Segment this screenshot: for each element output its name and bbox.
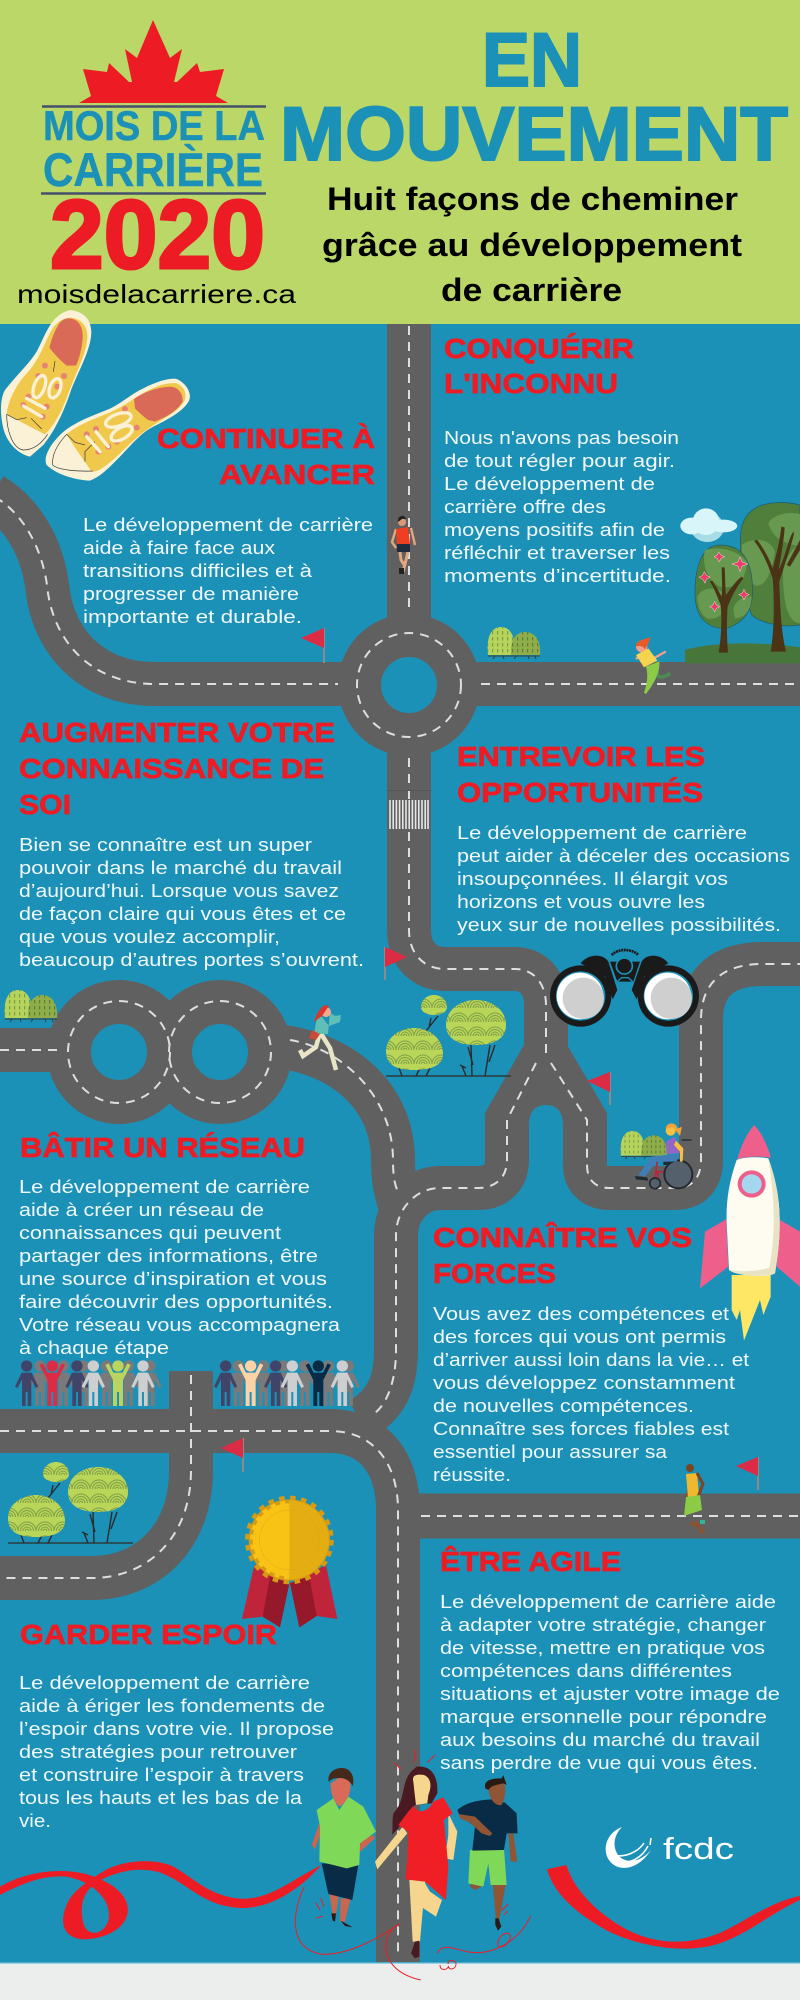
icon: bush by wheelchair bbox=[621, 1131, 667, 1159]
body text: Le développement de bbox=[444, 474, 655, 494]
panel: connaître vos forces bbox=[433, 1222, 749, 1485]
road fork bbox=[485, 1043, 607, 1135]
body text: situations et ajuster votre image de bbox=[440, 1684, 780, 1704]
body text: une source d’inspiration et vous bbox=[19, 1269, 327, 1289]
ribbon decoration bbox=[0, 1861, 800, 1949]
woman running on road bbox=[636, 637, 671, 694]
heading: ÊTRE AGILE bbox=[440, 1546, 621, 1577]
body text: transitions difficiles et à bbox=[83, 561, 313, 581]
icon: yellow shoes bbox=[1, 310, 190, 481]
body text: de tout régler pour agir. bbox=[444, 451, 675, 471]
body text: Le développement de carrière bbox=[83, 515, 373, 535]
body text: Le développement de carrière bbox=[457, 823, 747, 843]
body text: Votre réseau vous accompagnera bbox=[19, 1315, 341, 1335]
body text: faire découvrir des opportunités. bbox=[19, 1292, 333, 1312]
body text: compétences dans différentes bbox=[440, 1661, 732, 1681]
body text: insoupçonnées. Il élargit vos bbox=[457, 869, 728, 889]
body text: beaucoup d’autres portes s’ouvrent. bbox=[19, 950, 364, 970]
subtitle: Huit façons de cheminer bbox=[327, 181, 738, 217]
icon: runner in red shirt bbox=[392, 516, 415, 574]
body text bbox=[83, 515, 373, 627]
heading bbox=[157, 423, 375, 490]
icon: crowd of people bbox=[15, 1360, 360, 1406]
body text: réfléchir et traverser les bbox=[444, 543, 670, 563]
panel: entrevoir les opportunités bbox=[457, 741, 790, 935]
title: MOUVEMENT bbox=[280, 92, 788, 177]
icon: maple leaf bbox=[79, 20, 228, 103]
ribbon left bbox=[242, 1565, 289, 1627]
header logo: 2020 bbox=[50, 180, 265, 289]
heading bbox=[444, 333, 634, 399]
icon: gold medal bbox=[242, 1498, 337, 1627]
heading: CONTINUER À bbox=[157, 423, 375, 454]
subtitle: de carrière bbox=[441, 272, 622, 308]
body text: d’aujourd’hui. Lorsque vous savez bbox=[19, 881, 339, 901]
body bbox=[727, 1157, 780, 1276]
body text: moments d’incertitude. bbox=[444, 566, 671, 586]
panel: conquérir l'inconnu bbox=[444, 333, 679, 586]
left crowd bbox=[15, 1360, 155, 1406]
flag bbox=[384, 947, 407, 980]
body text: moyens positifs afin de bbox=[444, 520, 665, 540]
crosswalk bbox=[387, 790, 431, 829]
icon: rocket bbox=[700, 1125, 800, 1341]
flag bbox=[221, 1438, 244, 1472]
body text: réussite. bbox=[433, 1465, 511, 1485]
icon: three people running bbox=[295, 1750, 531, 1980]
body text: des stratégies pour retrouver bbox=[19, 1742, 297, 1762]
heading: AVANCER bbox=[219, 459, 375, 490]
heading: L'INCONNU bbox=[444, 368, 618, 399]
icon: cloud and blossoming trees bbox=[636, 502, 800, 694]
body text: Bien se connaître est un super bbox=[19, 835, 312, 855]
header logo: CARRIÈRE bbox=[43, 143, 263, 196]
body text: Le développement de carrière aide bbox=[440, 1592, 776, 1612]
panel: continuer à avancer bbox=[83, 423, 375, 627]
heading: CONQUÉRIR bbox=[444, 333, 634, 364]
heading: CONNAISSANCE DE bbox=[19, 753, 324, 784]
body text: progresser de manière bbox=[83, 584, 299, 604]
right crowd shadows bbox=[227, 1360, 360, 1406]
panel: augmenter votre connaissance de soi bbox=[19, 717, 364, 970]
body text bbox=[19, 1177, 341, 1358]
ribbon left bbox=[0, 1861, 321, 1939]
logo text: MOIS DE LA bbox=[43, 102, 265, 149]
body text: Le développement de carrière bbox=[19, 1177, 310, 1197]
body text: à adapter votre stratégie, changer bbox=[440, 1615, 766, 1635]
icon: person in wheelchair bbox=[635, 1123, 692, 1189]
subtitle: grâce au développement bbox=[322, 227, 742, 263]
body text: tous les hauts et les bas de la bbox=[19, 1788, 303, 1808]
icon: binoculars bbox=[550, 950, 699, 1027]
icon: bush on the left bbox=[5, 990, 57, 1022]
red swirl lines bbox=[295, 1750, 531, 1980]
cloud bbox=[680, 508, 737, 542]
body text: yeux sur de nouvelles possibilités. bbox=[457, 915, 781, 935]
ribbon right bbox=[290, 1565, 337, 1627]
icon: woman running with bag bbox=[300, 1005, 341, 1070]
icon: group of trees bbox=[386, 995, 511, 1076]
flag bbox=[587, 1072, 611, 1105]
body text: aide à créer un réseau de bbox=[19, 1200, 264, 1220]
heading bbox=[457, 741, 705, 808]
man in navy shirt bbox=[457, 1775, 518, 1931]
nose bbox=[737, 1125, 771, 1159]
body text: Nous n'avons pas besoin bbox=[444, 428, 679, 448]
body text: partager des informations, être bbox=[19, 1246, 318, 1266]
header logo: moisdelacarriere.ca bbox=[17, 279, 297, 309]
logo rules bbox=[41, 106, 266, 194]
body text: marque ersonnelle pour répondre bbox=[440, 1707, 767, 1727]
flag bbox=[301, 628, 325, 663]
medal disc bbox=[248, 1498, 331, 1582]
body text bbox=[457, 823, 790, 935]
heading bbox=[19, 717, 335, 820]
wordmark: fcdc bbox=[663, 1831, 734, 1866]
body text: d’arriver aussi loin dans la vie… et bbox=[433, 1350, 749, 1370]
title bbox=[280, 18, 788, 177]
heading: SOI bbox=[19, 789, 71, 820]
heading bbox=[433, 1222, 692, 1289]
body text bbox=[19, 835, 364, 970]
right crowd bbox=[214, 1360, 354, 1406]
body text: Connaître ses forces fiables est bbox=[433, 1419, 729, 1439]
body text: aide à ériger les fondements de bbox=[19, 1696, 325, 1716]
panel: bâtir un réseau bbox=[19, 1132, 341, 1358]
body text: vie. bbox=[19, 1811, 51, 1831]
body text: sans perdre de vue qui vous êtes. bbox=[440, 1753, 758, 1773]
body text: connaissances qui peuvent bbox=[19, 1223, 281, 1243]
man in green shirt bbox=[312, 1768, 376, 1927]
heading: ENTREVOIR LES bbox=[457, 741, 705, 772]
ground bbox=[685, 643, 800, 663]
window bbox=[738, 1170, 766, 1198]
fins bbox=[700, 1219, 728, 1288]
small tree with flowers bbox=[695, 545, 753, 653]
heading: BÂTIR UN RÉSEAU bbox=[20, 1132, 305, 1163]
icon: group of trees lower left bbox=[8, 1462, 133, 1543]
body text: de vitesse, mettre en pratique vos bbox=[440, 1638, 765, 1658]
body text: carrière offre des bbox=[444, 497, 606, 517]
panel: être agile bbox=[440, 1546, 780, 1773]
panel: garder espoir bbox=[19, 1619, 334, 1831]
heading: FORCES bbox=[433, 1258, 556, 1289]
heading: CONNAÎTRE VOS bbox=[433, 1222, 692, 1253]
ribbon right bbox=[547, 1865, 800, 1949]
flag bbox=[736, 1457, 759, 1490]
logo: fcdc bbox=[606, 1827, 734, 1868]
body text bbox=[440, 1592, 780, 1773]
body text: vous développez constamment bbox=[433, 1373, 735, 1393]
body text: que vous voulez accomplir, bbox=[19, 927, 280, 947]
flame bbox=[732, 1275, 771, 1341]
body text: l’espoir dans votre vie. Il propose bbox=[19, 1719, 334, 1739]
body text: peut aider à déceler des occasions bbox=[457, 846, 790, 866]
body text bbox=[444, 428, 679, 586]
body text: aux besoins du marché du travail bbox=[440, 1730, 760, 1750]
body text: à chaque étape bbox=[19, 1338, 169, 1358]
body text: aide à faire face aux bbox=[83, 538, 275, 558]
heading: GARDER ESPOIR bbox=[20, 1619, 277, 1650]
body text: essentiel pour assurer sa bbox=[433, 1442, 668, 1462]
body text bbox=[433, 1304, 749, 1485]
body text: et construire l’espoir à travers bbox=[19, 1765, 304, 1785]
body text: pouvoir dans le marché du travail bbox=[19, 858, 342, 878]
body text: horizons et vous ouvre les bbox=[457, 892, 705, 912]
left crowd shadows bbox=[28, 1360, 162, 1406]
body text: de façon claire qui vous êtes et ce bbox=[19, 904, 346, 924]
icon: bush near roundabout bbox=[488, 627, 540, 659]
body text: Vous avez des compétences et bbox=[433, 1304, 729, 1324]
body text: Le développement de carrière bbox=[19, 1673, 310, 1693]
icon: athlete running bbox=[684, 1464, 705, 1533]
body text: des forces qui vous ont permis bbox=[433, 1327, 726, 1347]
title: EN bbox=[482, 18, 582, 103]
big tree bbox=[740, 502, 800, 652]
swoosh mark bbox=[606, 1827, 651, 1868]
body text: de nouvelles compétences. bbox=[433, 1396, 694, 1416]
header logo bbox=[17, 20, 297, 309]
woman in red dress bbox=[375, 1767, 457, 1958]
heading: AUGMENTER VOTRE bbox=[19, 717, 335, 748]
body text: importante et durable. bbox=[83, 607, 302, 627]
body text bbox=[19, 1673, 334, 1831]
subtitle bbox=[322, 181, 742, 308]
heading: OPPORTUNITÉS bbox=[457, 777, 703, 808]
